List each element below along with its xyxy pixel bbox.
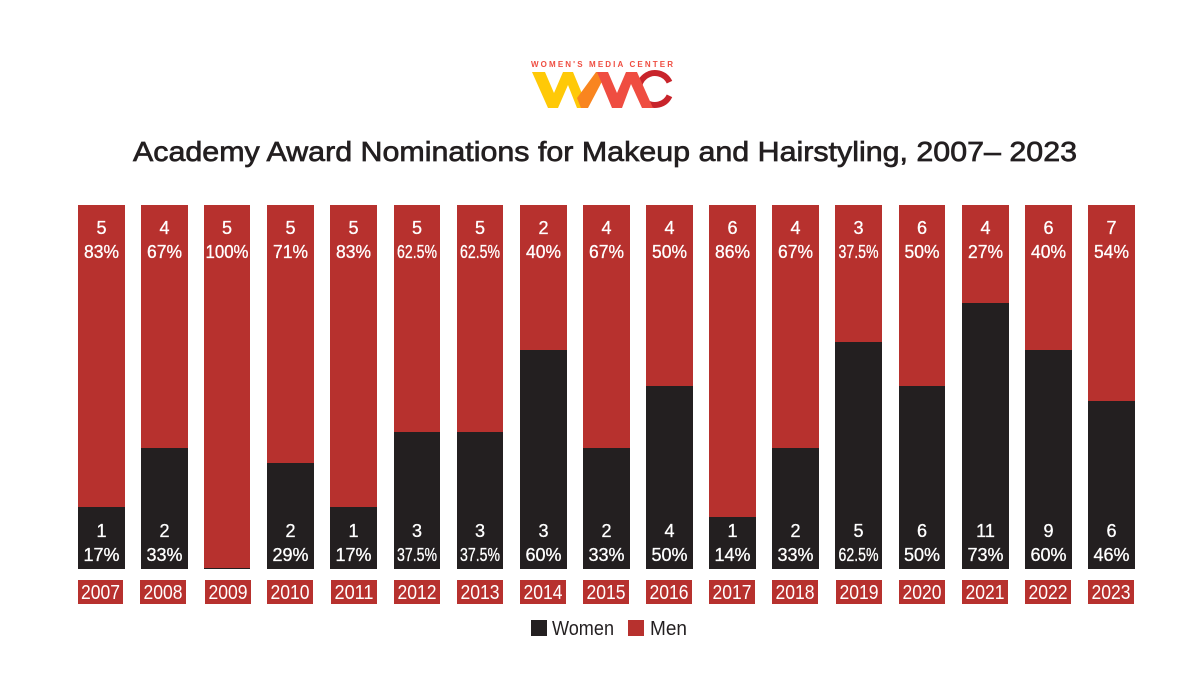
- bar: 2017: [709, 205, 756, 569]
- bar: 2011: [330, 205, 377, 569]
- bar: 2011: 83%: [336, 242, 371, 262]
- legend: [531, 618, 687, 640]
- bar: 2013: [457, 205, 503, 569]
- bar: 2015: 33%: [588, 545, 624, 565]
- year labels: 2016: [650, 582, 688, 604]
- bar: 2009: 5: [222, 218, 232, 238]
- bar: 2013: 5: [475, 218, 485, 238]
- bar: 2011: 1: [348, 521, 359, 541]
- bar: 2008: 4: [159, 218, 170, 238]
- bar: 2015: 2: [601, 521, 612, 541]
- bar: 2012: [394, 205, 440, 569]
- bar: 2021: [962, 205, 1009, 569]
- year labels: 2020: [902, 582, 942, 604]
- bar: 2023: 46%: [1094, 545, 1130, 565]
- year labels: 2017: [712, 582, 752, 604]
- bar: 2022: 60%: [1030, 545, 1066, 565]
- year labels: 2023: [1092, 582, 1130, 604]
- bar: 2022: 6: [1043, 218, 1054, 238]
- bar: 2009: 100%: [206, 242, 248, 262]
- year labels: 2007: [81, 582, 120, 604]
- bar: 2023: 7: [1106, 218, 1117, 238]
- bar: 2016: 4: [664, 218, 675, 238]
- bar: 2023: 6: [1106, 521, 1117, 541]
- bar: 2008: 67%: [147, 242, 182, 262]
- bar: 2013: 62.5%: [460, 242, 500, 262]
- bar: 2014: 3: [538, 521, 549, 541]
- bar: 2020: 50%: [904, 545, 940, 565]
- bar: 2008: [141, 205, 188, 569]
- bar: 2007: 83%: [84, 242, 119, 262]
- year labels: 2021: [966, 582, 1004, 604]
- bar: 2019: [835, 205, 882, 569]
- bar: 2010: 29%: [272, 545, 308, 565]
- bar: 2011: 5: [348, 218, 359, 238]
- bar: 2008: 33%: [146, 545, 182, 565]
- bar: 2010: 5: [285, 218, 296, 238]
- bar: 2007: 17%: [84, 545, 120, 565]
- bar: 2013: 3: [475, 521, 485, 541]
- bar: 2018: 67%: [778, 242, 813, 262]
- year labels: 2010: [270, 582, 310, 604]
- bar: 2018: [772, 205, 819, 569]
- bar: 2017: 1: [727, 521, 738, 541]
- bar: 2018: 2: [790, 521, 801, 541]
- bar: 2012: 5: [412, 218, 422, 238]
- bar: 2023: [1088, 205, 1135, 569]
- year labels: 2011: [334, 582, 374, 604]
- bar: 2010: [267, 205, 314, 569]
- bar: 2015: [583, 205, 630, 569]
- bar: 2020: 50%: [904, 242, 940, 262]
- bar: 2009: [204, 205, 250, 569]
- year labels: 2022: [1028, 582, 1068, 604]
- year labels: [78, 580, 1134, 604]
- bar: 2016: 50%: [652, 242, 687, 262]
- bar: 2008: 2: [159, 521, 170, 541]
- year labels: 2008: [144, 582, 182, 604]
- logo: Women's Media Center: [531, 60, 673, 108]
- bar: 2012: 62.5%: [397, 242, 437, 262]
- bar: 2019: 62.5%: [838, 545, 878, 565]
- bar: 2007: [78, 205, 125, 569]
- bar: 2021: 27%: [968, 242, 1003, 262]
- bar: 2015: 4: [601, 218, 612, 238]
- bar: 2010: 2: [285, 521, 296, 541]
- year labels: 2009: [208, 582, 248, 604]
- bar: 2020: [899, 205, 945, 569]
- bar: 2021: 73%: [968, 545, 1004, 565]
- bar: 2019: 3: [853, 218, 864, 238]
- legend: Men: [650, 618, 687, 640]
- bar: 2012: 3: [412, 521, 422, 541]
- bar: 2018: 4: [790, 218, 801, 238]
- logo: Women's Media Center: WOMEN'S MEDIA CENTER: [531, 60, 673, 69]
- bar: 2010: 71%: [273, 242, 308, 262]
- bar: 2018: 33%: [778, 545, 814, 565]
- title: Academy Award Nominations for Makeup and Hairstyling, 2007– 2023: [133, 136, 1077, 167]
- bar: 2016: [646, 205, 693, 569]
- bar: 2014: 40%: [526, 242, 561, 262]
- bar: 2022: 40%: [1031, 242, 1066, 262]
- bar: 2021: 11: [976, 521, 995, 541]
- bar: 2017: 86%: [715, 242, 750, 262]
- bar: 2014: 2: [538, 218, 549, 238]
- bar: 2007: 5: [96, 218, 107, 238]
- bar: 2020: 6: [917, 218, 927, 238]
- bar: 2020: 6: [917, 521, 927, 541]
- bar: 2012: 37.5%: [397, 545, 437, 565]
- bar: 2016: 4: [664, 521, 675, 541]
- bar: 2023: 54%: [1094, 242, 1129, 262]
- bar: 2022: 9: [1043, 521, 1054, 541]
- bar: 2015: 67%: [589, 242, 624, 262]
- year labels: 2019: [840, 582, 878, 604]
- year labels: 2015: [586, 582, 626, 604]
- bar: 2014: 60%: [526, 545, 562, 565]
- year labels: 2014: [524, 582, 562, 604]
- bar: 2016: 50%: [652, 545, 688, 565]
- bar: 2019: 37.5%: [838, 242, 878, 262]
- bar: 2013: 37.5%: [460, 545, 500, 565]
- bar: 2017: 14%: [714, 545, 750, 565]
- year labels: 2012: [398, 582, 436, 604]
- legend: Women: [552, 618, 614, 640]
- bar: 2007: 1: [96, 521, 107, 541]
- bar: 2019: 5: [853, 521, 864, 541]
- bar: 2011: 17%: [336, 545, 372, 565]
- year labels: 2018: [776, 582, 814, 604]
- bar: 2022: [1025, 205, 1072, 569]
- year labels: 2013: [460, 582, 500, 604]
- bar: 2014: [520, 205, 567, 569]
- bar: 2021: 4: [980, 218, 991, 238]
- bar: 2017: 6: [727, 218, 738, 238]
